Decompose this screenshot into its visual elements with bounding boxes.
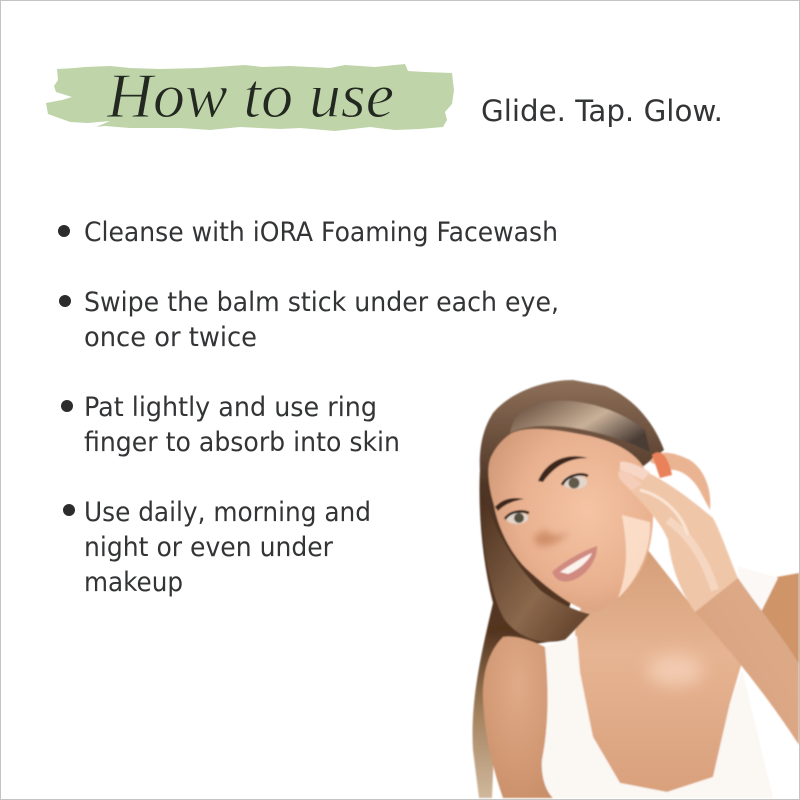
right eyebrow [538,456,588,482]
step 4: night or even under [84,532,334,563]
top strap right [737,566,778,614]
left eyebrow [495,498,524,511]
brush stroke background [46,64,454,131]
illustration: woman applying balm [473,380,799,798]
hair highlight [510,401,650,452]
step 1: Cleanse with iORA Foaming Facewash [84,217,558,248]
lips and smile [552,546,597,582]
cheek highlight [618,515,650,598]
step 4: makeup [84,567,183,598]
list: how to use steps [58,217,559,598]
hand and fingers [618,452,745,613]
step 2 [59,287,559,353]
step 4 [63,497,371,598]
right eye [562,474,588,489]
forearm [695,578,799,745]
nose shadow [535,530,570,546]
collarbone highlight [647,654,703,686]
heading: How to use [46,60,454,131]
back hair [473,380,664,798]
step 4: Use daily, morning and [84,497,371,528]
tagline: Glide. Tap. Glow. [481,94,723,128]
neck and chest [575,540,742,792]
face [488,429,653,612]
step 3: finger to absorb into skin [84,427,400,458]
left eye [505,511,529,524]
left shoulder [483,637,553,798]
right shoulder [760,573,799,664]
step 3: Pat lightly and use ring [84,392,377,423]
heading text: How to use [106,60,394,131]
hair over shoulder [482,490,590,642]
step 2: Swipe the balm stick under each eye, [84,287,559,318]
step 2: once or twice [84,322,257,353]
step 3 [61,392,400,458]
white tank top [542,636,773,798]
